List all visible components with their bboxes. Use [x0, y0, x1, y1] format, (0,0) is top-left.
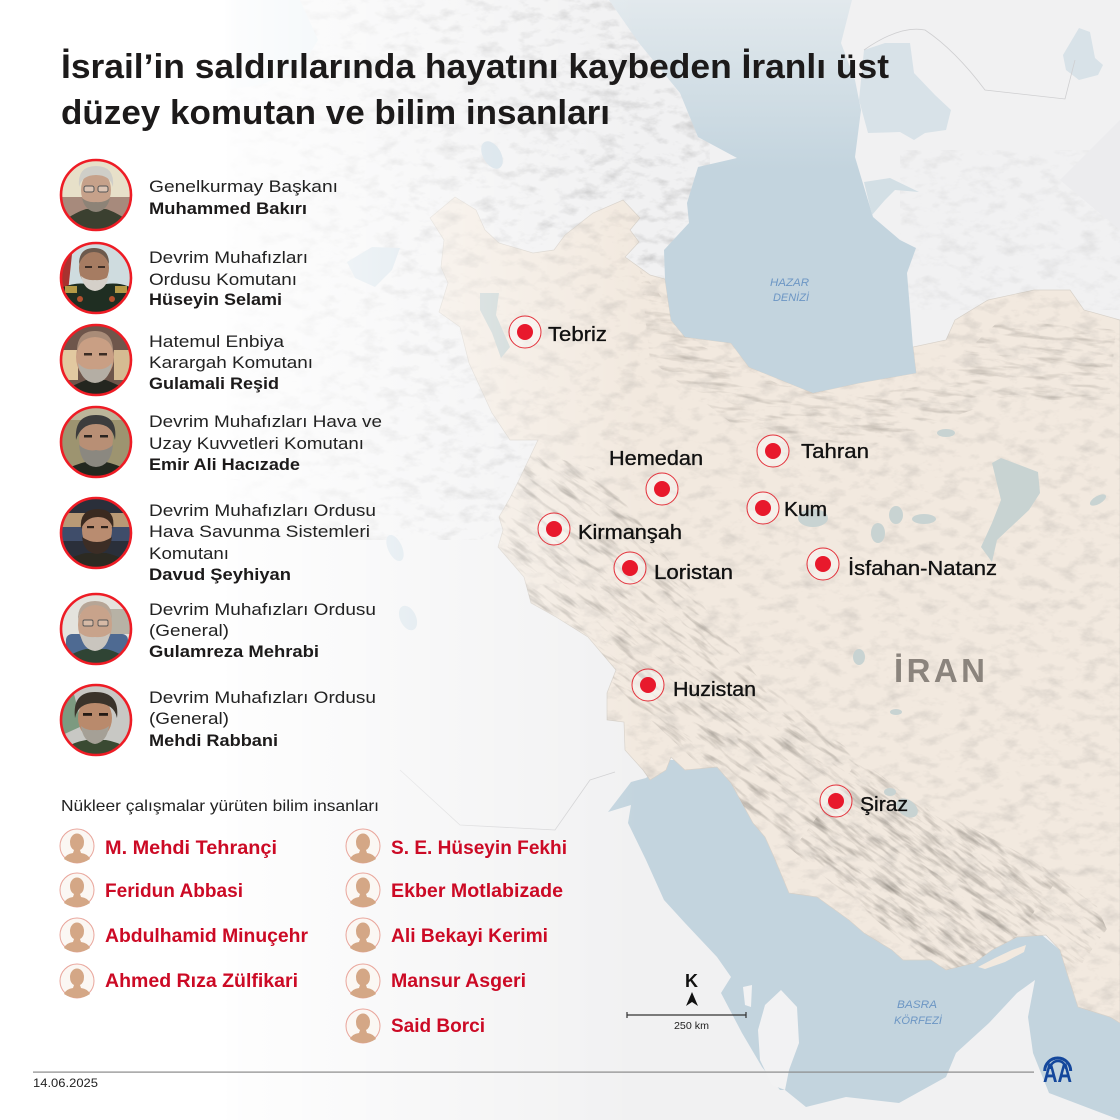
- text: Gulamali Reşid: [149, 332, 313, 393]
- city markers: [509, 316, 997, 817]
- photo: Muhammed Bakırı: [60, 159, 132, 231]
- text: Gulamali Reşid: Karargah Komutanı: [149, 353, 313, 372]
- scientist: Feridun Abbasi: [60, 873, 243, 907]
- marker: Şiraz: Şiraz: [860, 794, 908, 816]
- scientist: Ekber Motlabizade: [346, 873, 563, 907]
- north arrow: K: [685, 971, 698, 991]
- text: Gulamali Reşid: Hatemul Enbiya: [149, 332, 285, 351]
- marker: Kirmanşah: [538, 513, 682, 545]
- photo: Mehdi Rabbani: [60, 684, 132, 756]
- scientist: Ekber Motlabizade: Ekber Motlabizade: [391, 881, 563, 902]
- water: persian gulf: [608, 760, 1120, 1120]
- text: Hüseyin Selami: Ordusu Komutanı: [149, 270, 297, 289]
- aral sea: [859, 43, 951, 140]
- marker: Hemedan: Hemedan: [609, 448, 703, 470]
- scale bar: [627, 1012, 746, 1032]
- sea label: Hazar Denizi: [770, 277, 810, 304]
- iran relief: [442, 212, 1120, 1020]
- photo: Gulamali Reşid: [60, 324, 132, 396]
- sea label: Basra Körfezi: [894, 999, 943, 1027]
- footer line: [33, 1072, 1034, 1073]
- text: Muhammed Bakırı: Genelkurmay Başkanı: [149, 177, 338, 196]
- scientist: S. E. Hüseyin Fekhi: S. E. Hüseyin Fekhi: [391, 838, 567, 859]
- lakes: [480, 293, 1108, 821]
- marker: Huzistan: [632, 669, 756, 701]
- marker: Tahran: [757, 435, 869, 467]
- text: Davud Şeyhiyan: Davud Şeyhiyan: [149, 565, 291, 584]
- text: Davud Şeyhiyan: Devrim Muhafızları Ordusu: [149, 501, 376, 520]
- scientist: S. E. Hüseyin Fekhi: [346, 829, 567, 863]
- scientist: M. Mehdi Tehrançi: [60, 829, 277, 863]
- relief: central asia: [900, 150, 1120, 310]
- marker: Şiraz: [820, 785, 908, 817]
- commander: Hüseyin Selami: [60, 242, 308, 314]
- marker: Kum: [747, 492, 827, 524]
- commander: Gulamali Reşid: [60, 324, 313, 396]
- scientist: M. Mehdi Tehrançi: M. Mehdi Tehrançi: [105, 838, 277, 859]
- text: Emir Ali Hacızade: Devrim Muhafızları Hava ve: [149, 412, 382, 431]
- qeshm island: [978, 945, 1026, 969]
- photo: Hüseyin Selami: [60, 242, 132, 314]
- logo: Anadolu Agency: AA: [1043, 1058, 1072, 1088]
- relief: caucasus and anatolia: [230, 0, 710, 540]
- lakes outside iran: [347, 138, 507, 633]
- iran land shape: [430, 197, 1120, 1023]
- text: Mehdi Rabbani: [149, 688, 376, 750]
- text: Emir Ali Hacızade: [149, 412, 382, 474]
- text: Davud Şeyhiyan: [149, 501, 376, 584]
- scientist: Said Borci: Said Borci: [391, 1016, 485, 1037]
- marker: Loristan: [614, 552, 733, 584]
- scientist: Abdulhamid Minuçehr: Abdulhamid Minuçehr: [105, 926, 309, 947]
- country borders: [0, 29, 1075, 830]
- scientist: Ahmed Rıza Zülfikari: [60, 964, 298, 998]
- text: Emir Ali Hacızade: Uzay Kuvvetleri Komutanı: [149, 434, 364, 453]
- text: Mehdi Rabbani: (General): [149, 709, 229, 728]
- text: Gulamali Reşid: Gulamali Reşid: [149, 374, 279, 393]
- text: Gulamreza Mehrabi: [149, 600, 376, 661]
- bahrain: [743, 985, 752, 1007]
- text: Hüseyin Selami: Hüseyin Selami: [149, 290, 282, 309]
- scale bar: 250 km: [674, 1020, 709, 1032]
- scientist: Ali Bekayi Kerimi: [346, 918, 548, 952]
- scientist: Ahmed Rıza Zülfikari: Ahmed Rıza Zülfikari: [105, 971, 298, 992]
- scientist: Mansur Asgeri: Mansur Asgeri: [391, 971, 526, 992]
- text: Mehdi Rabbani: Devrim Muhafızları Ordusu: [149, 688, 376, 707]
- commander: Gulamreza Mehrabi: [60, 593, 376, 665]
- black sea: [225, 0, 318, 90]
- marker: Huzistan: Huzistan: [673, 679, 756, 701]
- commander: Mehdi Rabbani: [60, 684, 376, 756]
- title: düzey komutan ve bilim insanları: [61, 94, 610, 132]
- sea label: Basra Körfezi: BASRA: [897, 999, 937, 1011]
- scientist: Ali Bekayi Kerimi: Ali Bekayi Kerimi: [391, 926, 548, 947]
- scientist: Feridun Abbasi: Feridun Abbasi: [105, 881, 243, 902]
- text: Hüseyin Selami: [149, 248, 308, 309]
- sea label: Hazar Denizi: DENİZİ: [773, 292, 810, 304]
- text: Hüseyin Selami: Devrim Muhafızları: [149, 248, 308, 267]
- text: Gulamreza Mehrabi: Gulamreza Mehrabi: [149, 642, 319, 661]
- title: [61, 48, 889, 132]
- text: Gulamreza Mehrabi: Devrim Muhafızları Ordusu: [149, 600, 376, 619]
- sea label: Basra Körfezi: KÖRFEZİ: [894, 1015, 943, 1027]
- marker: Loristan: Loristan: [654, 562, 733, 584]
- water: caspian sea: [609, 0, 916, 393]
- marker: Tebriz: [509, 316, 607, 348]
- scientist: Said Borci: [346, 1009, 485, 1043]
- marker: İsfahan-Natanz: İsfahan-Natanz: [848, 557, 997, 580]
- date: 14.06.2025: [33, 1076, 98, 1090]
- eastern plain tint: [1060, 120, 1120, 230]
- text: Muhammed Bakırı: [149, 177, 338, 218]
- marker: Tebriz: Tebriz: [548, 324, 607, 346]
- text: Davud Şeyhiyan: Komutanı: [149, 544, 229, 563]
- commander: Muhammed Bakırı: [60, 159, 338, 231]
- text: Gulamreza Mehrabi: (General): [149, 621, 229, 640]
- sea label: Hazar Denizi: HAZAR: [770, 277, 809, 289]
- title: İsrail’in saldırılarında hayatını kaybeden İranlı üst: [61, 48, 889, 86]
- commander: Emir Ali Hacızade: [60, 406, 382, 478]
- text: Emir Ali Hacızade: Emir Ali Hacızade: [149, 455, 300, 474]
- text: Davud Şeyhiyan: Hava Savunma Sistemleri: [149, 522, 370, 541]
- qatar peninsula: [758, 990, 799, 1090]
- scientists heading: Nükleer çalışmalar yürüten bilim insanları: [61, 798, 379, 815]
- commander: Davud Şeyhiyan: [60, 497, 376, 584]
- marker: Hemedan: [609, 448, 703, 505]
- northeast lake: [1063, 28, 1103, 80]
- text: Mehdi Rabbani: Mehdi Rabbani: [149, 731, 278, 750]
- map background: [266, 0, 1120, 1120]
- scientist: Mansur Asgeri: [346, 964, 526, 998]
- marker: Kirmanşah: Kirmanşah: [578, 522, 682, 544]
- north arrow: [685, 971, 698, 1006]
- country label: İRAN: İRAN: [894, 652, 985, 689]
- text: Muhammed Bakırı: Muhammed Bakırı: [149, 199, 307, 218]
- marker: Kum: Kum: [784, 499, 827, 521]
- photo: Emir Ali Hacızade: [60, 406, 132, 478]
- kara bogaz: [864, 178, 919, 215]
- photo: Gulamreza Mehrabi: [60, 593, 132, 665]
- scientist: Abdulhamid Minuçehr: [60, 918, 309, 952]
- marker: İsfahan-Natanz: [807, 548, 997, 580]
- scientists list: [60, 829, 567, 1043]
- photo: Davud Şeyhiyan: [60, 497, 132, 569]
- marker: Tahran: Tahran: [801, 441, 869, 463]
